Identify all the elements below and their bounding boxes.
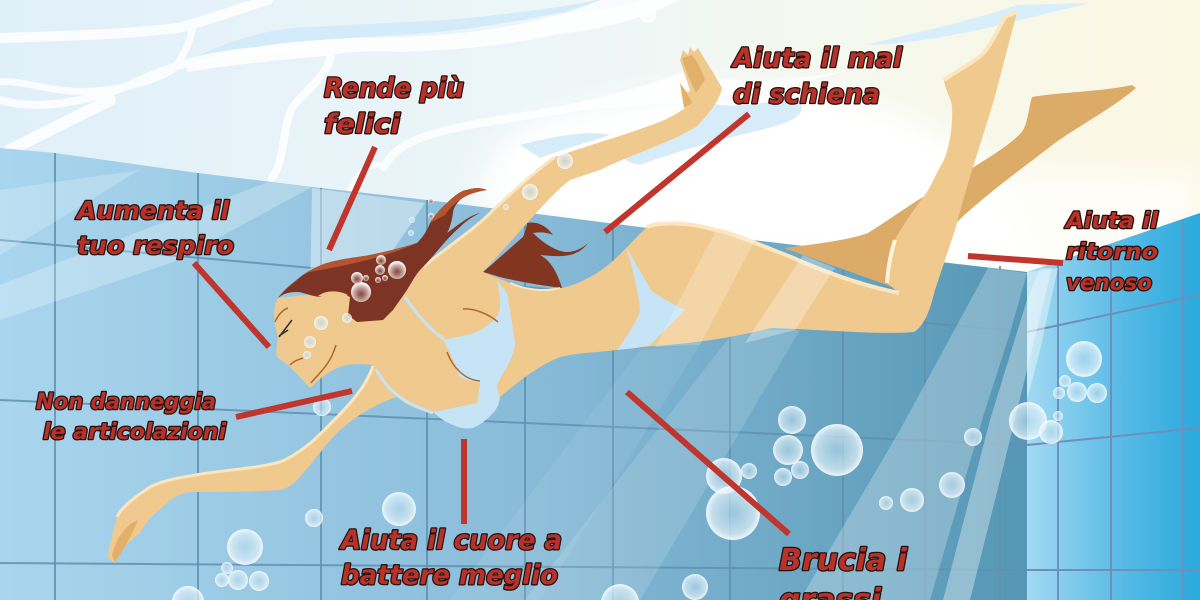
line: Non danneggia le articolazioni (236, 391, 352, 417)
caustic lines (0, 0, 700, 190)
line: Aumenta il tuo respiro (194, 263, 269, 347)
label: Rende più felici: Rende più (324, 73, 464, 104)
label: Aumenta il tuo respiro: tuo respiro (77, 231, 234, 260)
rays across body (655, 232, 755, 347)
line: Brucia i grassi (627, 392, 789, 534)
face lines (275, 308, 498, 383)
body and front leg (274, 12, 1017, 412)
line: Aiuta il cuore a battere meglio (461, 439, 467, 524)
hair (278, 188, 487, 322)
right wall of pool (1027, 213, 1200, 600)
back wall of pool (0, 148, 1027, 600)
line: Aiuta il ritorno venoso (968, 256, 1063, 263)
hair bubbles (351, 198, 434, 302)
water surface background (0, 0, 1200, 300)
label: Aiuta il ritorno venoso: Aiuta il (1064, 209, 1158, 234)
bikini straps (376, 297, 444, 413)
front arm (108, 365, 397, 563)
line: Aiuta il mal di schiena (605, 114, 749, 232)
label: Aiuta il mal di schiena: di schiena (733, 79, 880, 110)
hair behind arm (483, 222, 588, 288)
swimmer (108, 12, 1136, 563)
tile grid (0, 153, 1027, 600)
label: Aiuta il cuore a battere meglio: battere meglio (341, 560, 558, 591)
body highlights (117, 12, 1017, 517)
label: Aumenta il tuo respiro: Aumenta il (75, 196, 229, 225)
label: Brucia i grassi: Brucia i (779, 543, 908, 578)
back leg (784, 85, 1136, 300)
label: Aiuta il ritorno venoso: ritorno (1066, 240, 1158, 265)
label: Non danneggia le articolazioni: Non danneggia (36, 390, 216, 415)
bikini bottom (617, 247, 685, 350)
hand shading (112, 55, 705, 562)
raised arm (423, 47, 722, 300)
light rays on wall (0, 170, 1058, 600)
bikini top (433, 280, 515, 428)
bubbles (172, 153, 1107, 600)
soft white glow (470, 88, 1200, 280)
line: Rende più felici (329, 147, 375, 250)
label: Rende più felici: felici (324, 109, 401, 140)
label: Aiuta il mal di schiena: Aiuta il mal (731, 43, 903, 74)
label: Aiuta il ritorno venoso: venoso (1066, 271, 1152, 296)
label: Non danneggia le articolazioni: le articolazioni (43, 420, 226, 445)
label: Aiuta il cuore a battere meglio: Aiuta il cuore a (339, 525, 562, 556)
